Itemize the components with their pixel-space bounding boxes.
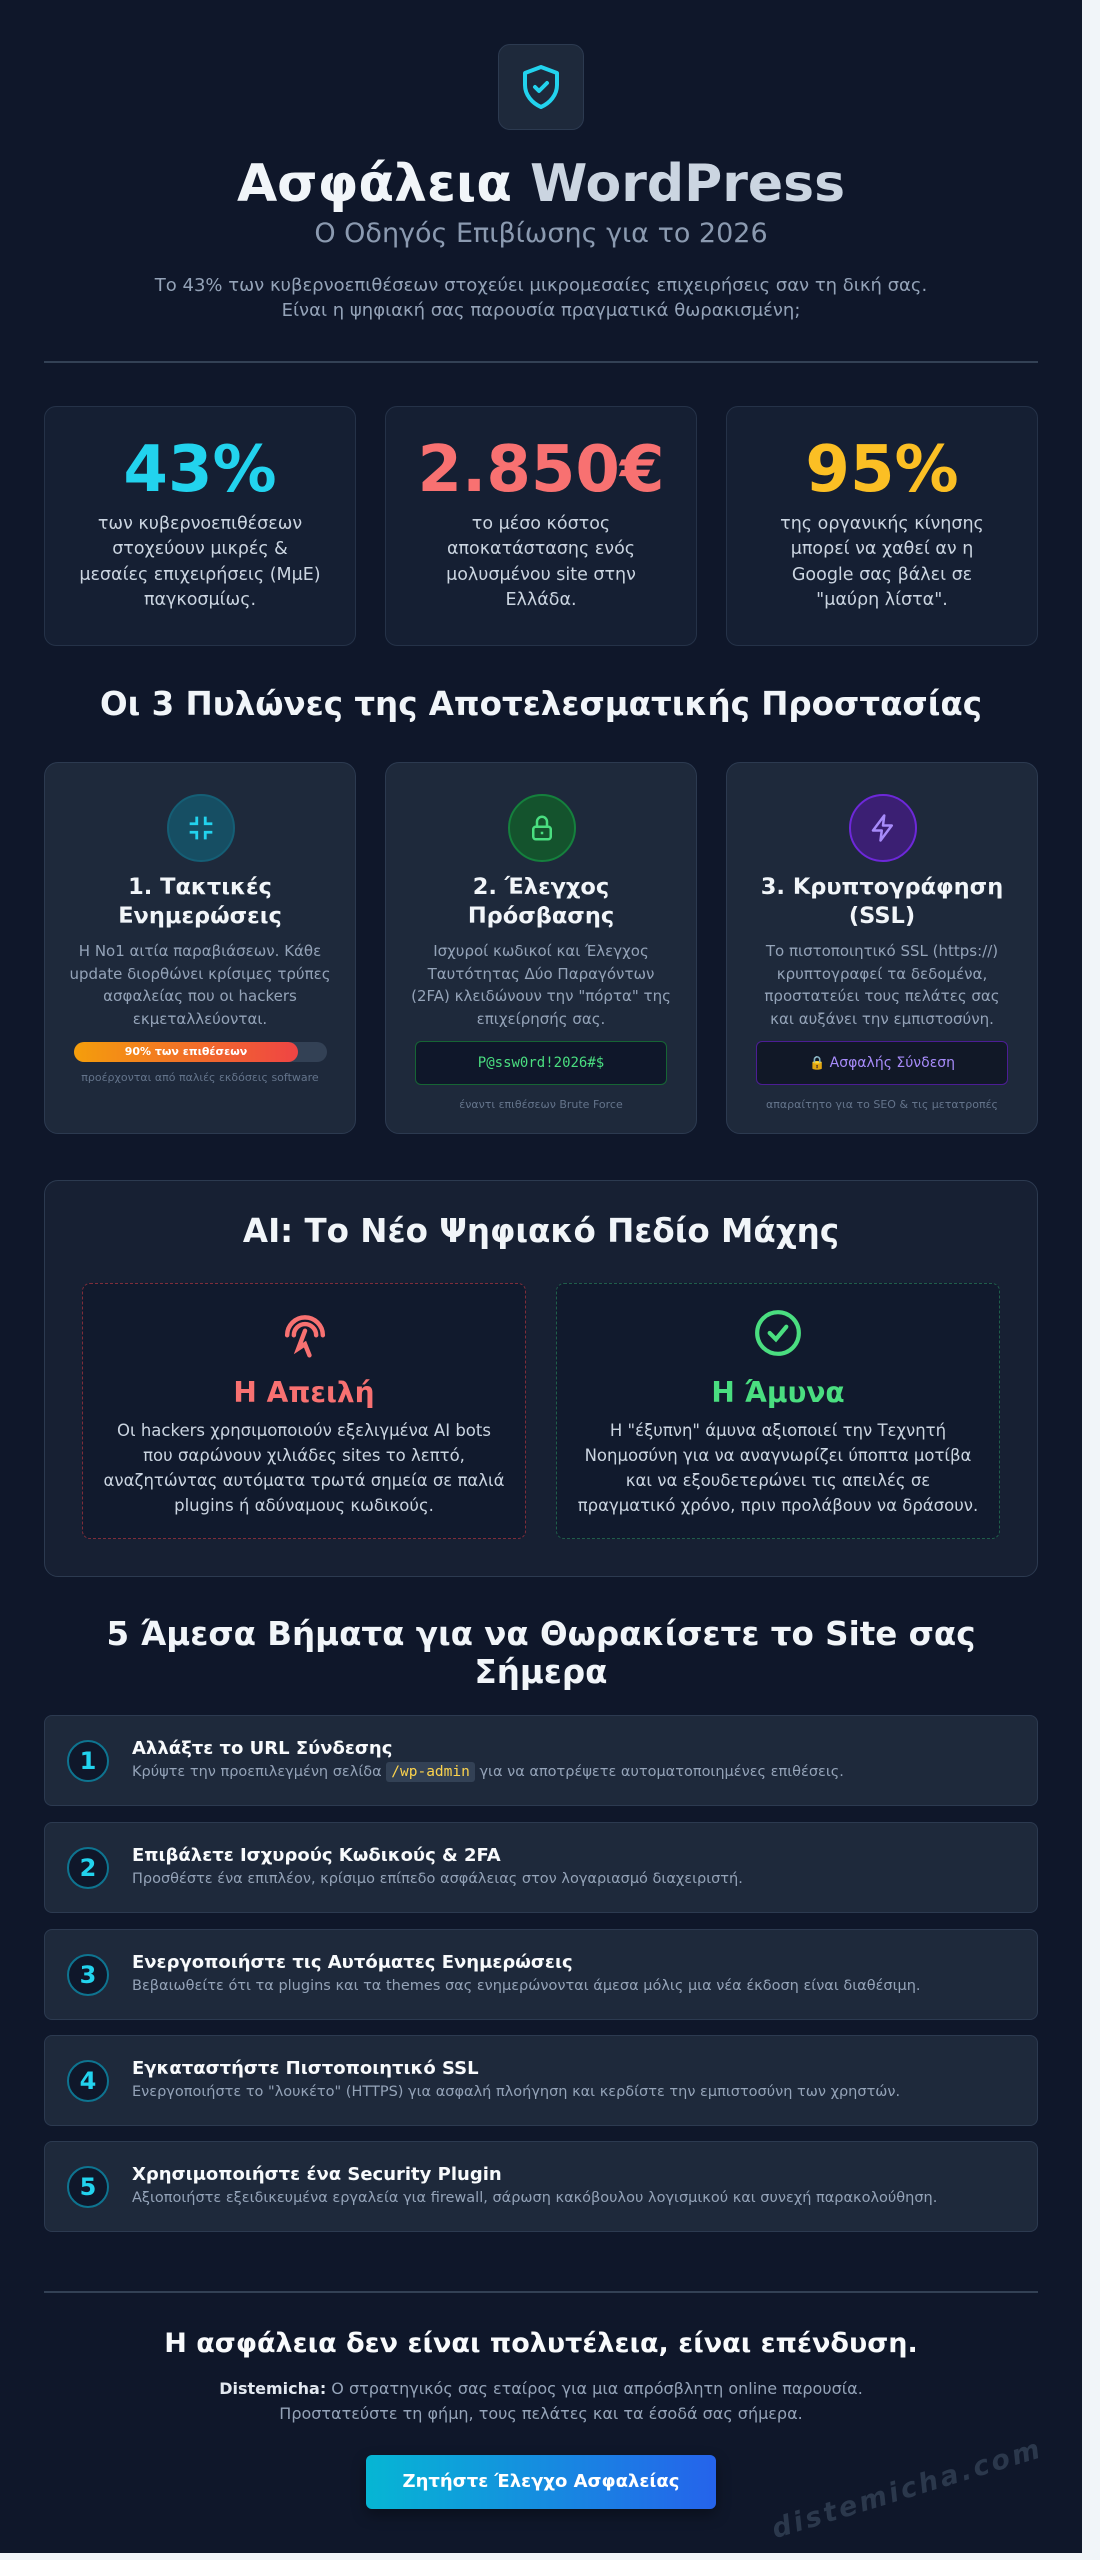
- panel: pillar access: επιχείρησής σας.: [477, 1010, 605, 1028]
- icon: check circle: [755, 1310, 801, 1356]
- panel: AI: [44, 1180, 1038, 1577]
- footer heading: Η ασφάλεια δεν είναι πολυτέλεια, είναι επένδυση.: [164, 2328, 918, 2359]
- watermark: distemicha.com: [768, 2433, 1046, 2545]
- CTA button: [366, 2455, 716, 2509]
- step 3: Ενεργοποιήστε τις Αυτόματες Ενημερώσεις: [132, 1952, 573, 1973]
- step 5: Χρησιμοποιήστε ένα Security Plugin: [132, 2164, 502, 2185]
- icon: lightning: [849, 794, 917, 862]
- icon: lock: [508, 794, 576, 862]
- subtitle: Ο Οδηγός Επιβίωσης για το 2026: [314, 218, 768, 249]
- stat card: 2.850€: το μέσο κόστος αποκατάστασης ενός μολυσμένου site στην Ελλάδα.: [446, 514, 636, 610]
- step 2: 2: [80, 1854, 96, 1882]
- title: Ασφάλεια WordPress: [237, 154, 845, 214]
- box: threat: [82, 1283, 526, 1539]
- step 3: [44, 1929, 1038, 2020]
- box: threat: Οι hackers χρησιμοποιούν εξελιγμένα AI bots που σαρώνουν χιλιάδες sites το λεπτό, αναζητώντας αυτόματα τρωτά σημεία σε παλιά plugins ή αδύναμους κωδικούς.: [104, 1421, 504, 1515]
- step 4: Εγκαταστήστε Πιστοποιητικό SSL: [132, 2058, 479, 2079]
- panel: pillar updates: 1. Τακτικές: [128, 874, 272, 900]
- step 4: [44, 2035, 1038, 2126]
- box: threat: Η Απειλή: [233, 1376, 375, 1409]
- step 4: Ενεργοποιήστε το "λουκέτο" (HTTPS) για ασφαλή πλοήγηση και κερδίστε την εμπιστοσύνη των χρηστών.: [132, 2084, 900, 2100]
- panel: pillar access: [385, 762, 697, 1134]
- secure login box: 🔒 Ασφαλής Σύνδεση: [809, 1055, 955, 1071]
- box: defense: Η Άμυνα: [711, 1376, 845, 1409]
- icon: radar cursor: [284, 1315, 326, 1358]
- stat card: 43%: μεσαίες επιχειρήσεις (ΜμΕ): [79, 565, 321, 585]
- panel: pillar updates: Η Νο1 αιτία παραβιάσεων. Κάθε update διορθώνει κρίσιμες τρύπες ασφαλείας που οι hackers εκμεταλλεύονται.: [69, 942, 331, 1028]
- stat card: 95%: 95%: [805, 433, 959, 507]
- panel: pillar ssl: (SSL): [849, 903, 915, 929]
- footer text: Distemicha: Ο στρατηγικός σας εταίρος για μια απρόσβλητη online παρουσία.: [219, 2379, 863, 2398]
- step 1: Κρύψτε την προεπιλεγμένη σελίδα /wp-admin για να αποτρέψετε αυτοματοποιημένες επιθέσεις.: [132, 1764, 844, 1780]
- panel: pillar updates: [44, 762, 356, 1134]
- step 2: Επιβάλετε Ισχυρούς Κωδικούς & 2FA: [132, 1845, 501, 1866]
- heading: 5 steps: Σήμερα: [475, 1653, 607, 1691]
- stat card: 43%: παγκοσμίως.: [144, 590, 256, 610]
- stat card: 2.850€: [385, 406, 697, 646]
- panel: pillar access: (2FA) κλειδώνουν την "πόρτα" της: [411, 987, 671, 1005]
- heading: 5 steps: [106, 1615, 976, 1691]
- panel: pillar ssl: Το πιστοποιητικό SSL (https://) κρυπτογραφεί τα δεδομένα, προστατεύει τους πελάτες σας και αυξάνει την εμπιστοσύνη.: [764, 942, 1000, 1028]
- panel: pillar access: Πρόσβασης: [468, 903, 614, 929]
- panel: pillar access: Ισχυροί κωδικοί και Έλεγχος: [433, 942, 649, 960]
- step 2: [44, 1822, 1038, 1913]
- step 5: 5: [80, 2173, 96, 2201]
- panel: pillar access: Ταυτότητας Δύο Παραγόντων: [428, 965, 654, 983]
- stat card: 43%: [44, 406, 356, 646]
- stat card: 43%: στοχεύουν μικρές &: [112, 539, 288, 559]
- password box: [415, 1041, 667, 1085]
- panel: pillar updates: προέρχονται από παλιές εκδόσεις software: [81, 1071, 319, 1084]
- panel: pillar updates: Ενημερώσεις: [118, 903, 282, 929]
- step 1: Αλλάξτε το URL Σύνδεσης: [132, 1738, 392, 1759]
- stat card: 43%: των κυβερνοεπιθέσεων: [98, 514, 302, 534]
- intro text: Το 43% των κυβερνοεπιθέσεων στοχεύει μικρομεσαίες επιχειρήσεις σαν τη δική σας.: [155, 275, 927, 296]
- panel: pillar ssl: [726, 762, 1038, 1134]
- step 5: [44, 2141, 1038, 2232]
- heading: 5 steps: 5 Άμεσα Βήματα για να Θωρακίσετε το Site σας: [106, 1615, 976, 1653]
- panel: pillar access: 2. Έλεγχος: [473, 874, 609, 900]
- panel: pillar access: έναντι επιθέσεων Brute Force: [459, 1098, 623, 1111]
- panel: pillar ssl: 3. Κρυπτογράφηση: [761, 874, 1003, 900]
- step 3: 3: [80, 1961, 96, 1989]
- progress bar: 90% των επιθέσεων: [125, 1045, 247, 1058]
- stat card: 95%: [726, 406, 1038, 646]
- CTA button: Ζητήστε Έλεγχο Ασφαλείας: [403, 2471, 679, 2492]
- step 1: 1: [80, 1747, 96, 1775]
- icon: updates: [167, 794, 235, 862]
- step 2: Προσθέστε ένα επιπλέον, κρίσιμο επίπεδο ασφάλειας στον λογαριασμό διαχειριστή.: [132, 1871, 743, 1887]
- heading: AI: AI: Το Νέο Ψηφιακό Πεδίο Μάχης: [243, 1212, 839, 1250]
- footer text: [219, 2379, 863, 2423]
- box: defense: [556, 1283, 1000, 1539]
- icon: shield: [498, 44, 584, 130]
- stat card: 2.850€: 2.850€: [418, 433, 664, 507]
- secure login box: [756, 1041, 1008, 1085]
- box: defense: Η "έξυπνη" άμυνα αξιοποιεί την Τεχνητή Νοημοσύνη για να αναγνωρίζει ύποπτα μοτίβα και να εξουδετερώνει τις απειλές σε πραγματικό χρόνο, πριν προλάβουν να δράσουν.: [578, 1421, 978, 1515]
- heading: pillars: Οι 3 Πυλώνες της Αποτελεσματικής Προστασίας: [100, 685, 982, 723]
- password box: P@ssw0rd!2026#$: [478, 1055, 604, 1071]
- stat card: 43%: 43%: [123, 433, 277, 507]
- progress bar: [74, 1042, 327, 1062]
- footer text: Προστατεύστε τη φήμη, τους πελάτες και τα έσοδά σας σήμερα.: [279, 2404, 803, 2423]
- intro text: [154, 275, 927, 321]
- step 3: Βεβαιωθείτε ότι τα plugins και τα themes σας ενημερώνονται άμεσα μόλις μια νέα έκδοση είναι διαθέσιμη.: [132, 1978, 921, 1994]
- step 1: [44, 1715, 1038, 1806]
- panel: pillar ssl: απαραίτητο για το SEO & τις μετατροπές: [766, 1098, 998, 1111]
- step 4: 4: [80, 2067, 96, 2095]
- step 5: Αξιοποιήστε εξειδικευμένα εργαλεία για firewall, σάρωση κακόβουλου λογισμικού και συνεχή παρακολούθηση.: [132, 2190, 937, 2206]
- intro text: Είναι η ψηφιακή σας παρουσία πραγματικά θωρακισμένη;: [282, 300, 800, 321]
- stat card: 95%: της οργανικής κίνησης μπορεί να χαθεί αν η Google σας βάλει σε "μαύρη λίστα".: [780, 514, 984, 610]
